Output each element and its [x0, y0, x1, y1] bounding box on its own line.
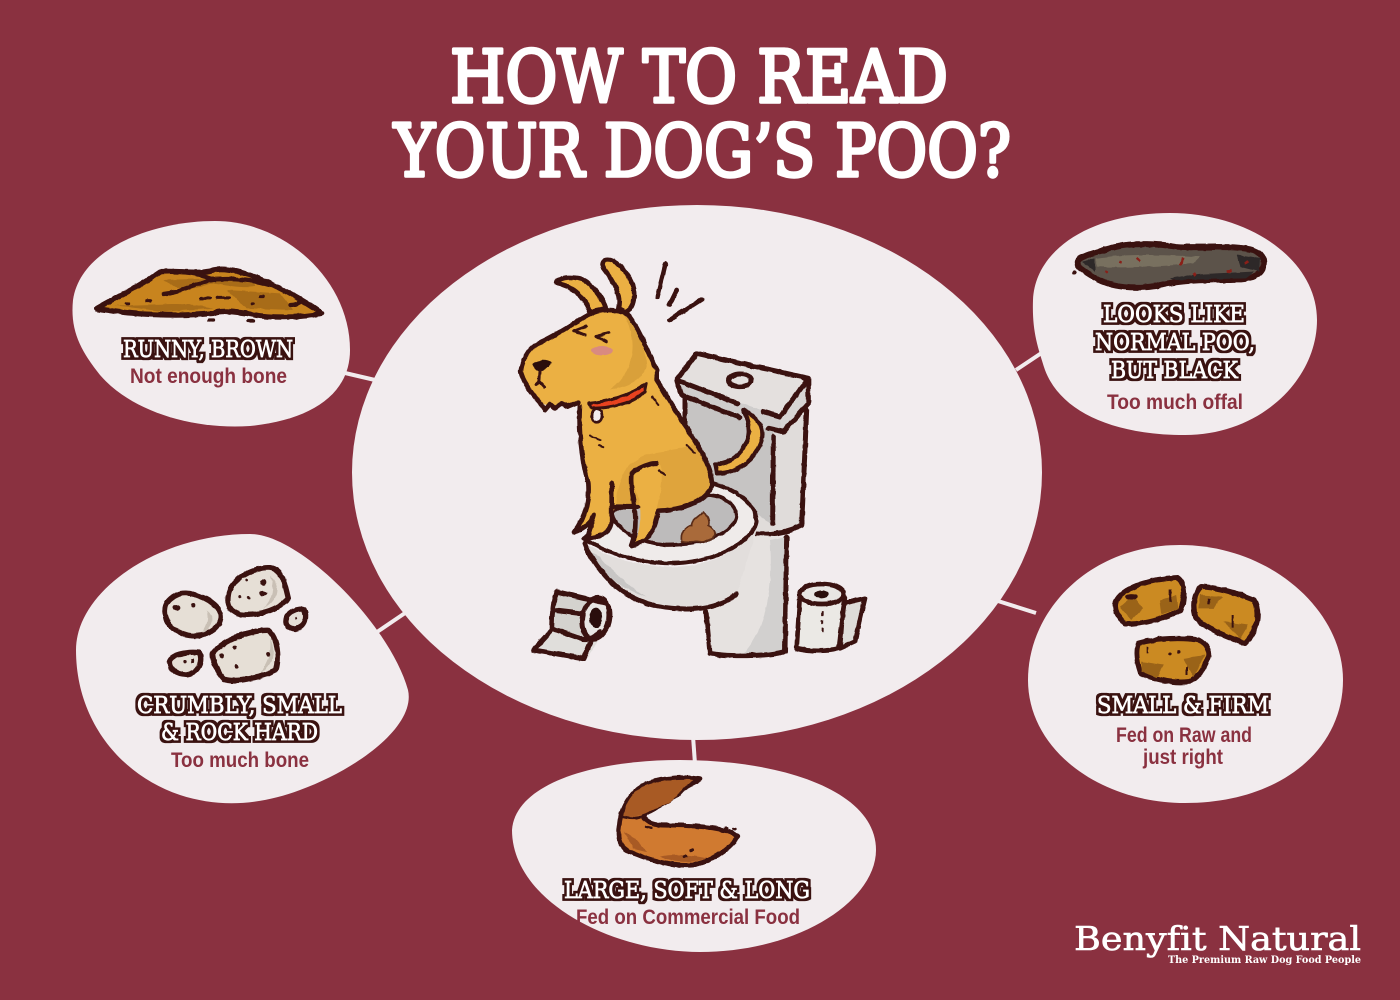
logo: Benyfit Natural: Benyfit Natural — [1074, 919, 1361, 958]
connector lines — [345, 350, 1046, 764]
caption: Fed on Raw and — [1116, 724, 1252, 747]
logo: Benyfit Natural: The Premium Raw Dog Food People — [1168, 955, 1361, 966]
panel: large, soft and long — [512, 760, 876, 952]
icon: rocks — [165, 568, 306, 680]
panel: small and firm — [1028, 545, 1343, 803]
panel: crumbly, small and rock hard — [76, 534, 409, 803]
label: CRUMBLY, SMALL — [137, 693, 342, 719]
icon: black poo — [1072, 244, 1264, 287]
panel: runny, brown — [72, 221, 350, 427]
label: NORMAL POO, — [1095, 330, 1255, 356]
panel: looks like normal poo — [1033, 213, 1317, 435]
caption: Fed on Commercial Food — [576, 906, 800, 929]
label — [1095, 302, 1255, 384]
illustration: dog on toilet — [521, 260, 865, 658]
icon: toilet — [583, 353, 808, 656]
title: YOUR DOG’S POO? — [393, 109, 1011, 193]
label: LARGE, SOFT & LONG — [564, 878, 810, 904]
caption: Not enough bone — [130, 365, 287, 388]
label — [137, 693, 342, 746]
icon: face — [532, 360, 552, 372]
icon: runny poo — [97, 269, 322, 321]
icon: poo in bowl — [681, 512, 715, 542]
label: & ROCK HARD — [161, 720, 318, 746]
icon: firm pieces — [1115, 578, 1258, 682]
caption: Too much bone — [171, 749, 309, 772]
label: RUNNY, BROWN — [123, 337, 293, 363]
icon: collar — [588, 383, 647, 408]
icon: long poo — [618, 778, 738, 865]
caption: just right — [1142, 746, 1223, 769]
label: LOOKS LIKE — [1103, 302, 1245, 328]
icon: left toilet roll — [533, 592, 613, 658]
icon: dog — [521, 260, 712, 546]
caption — [1116, 724, 1252, 769]
label: SMALL & FIRM — [1097, 693, 1269, 719]
icon: right toilet roll — [797, 584, 865, 651]
icon: tail — [715, 410, 762, 473]
title: HOW TO READ — [450, 35, 948, 119]
icon: motion lines — [657, 263, 702, 320]
panel: central illustration — [352, 205, 1042, 740]
title — [393, 35, 1011, 193]
caption: Too much offal — [1107, 391, 1243, 414]
label: BUT BLACK — [1111, 358, 1239, 384]
